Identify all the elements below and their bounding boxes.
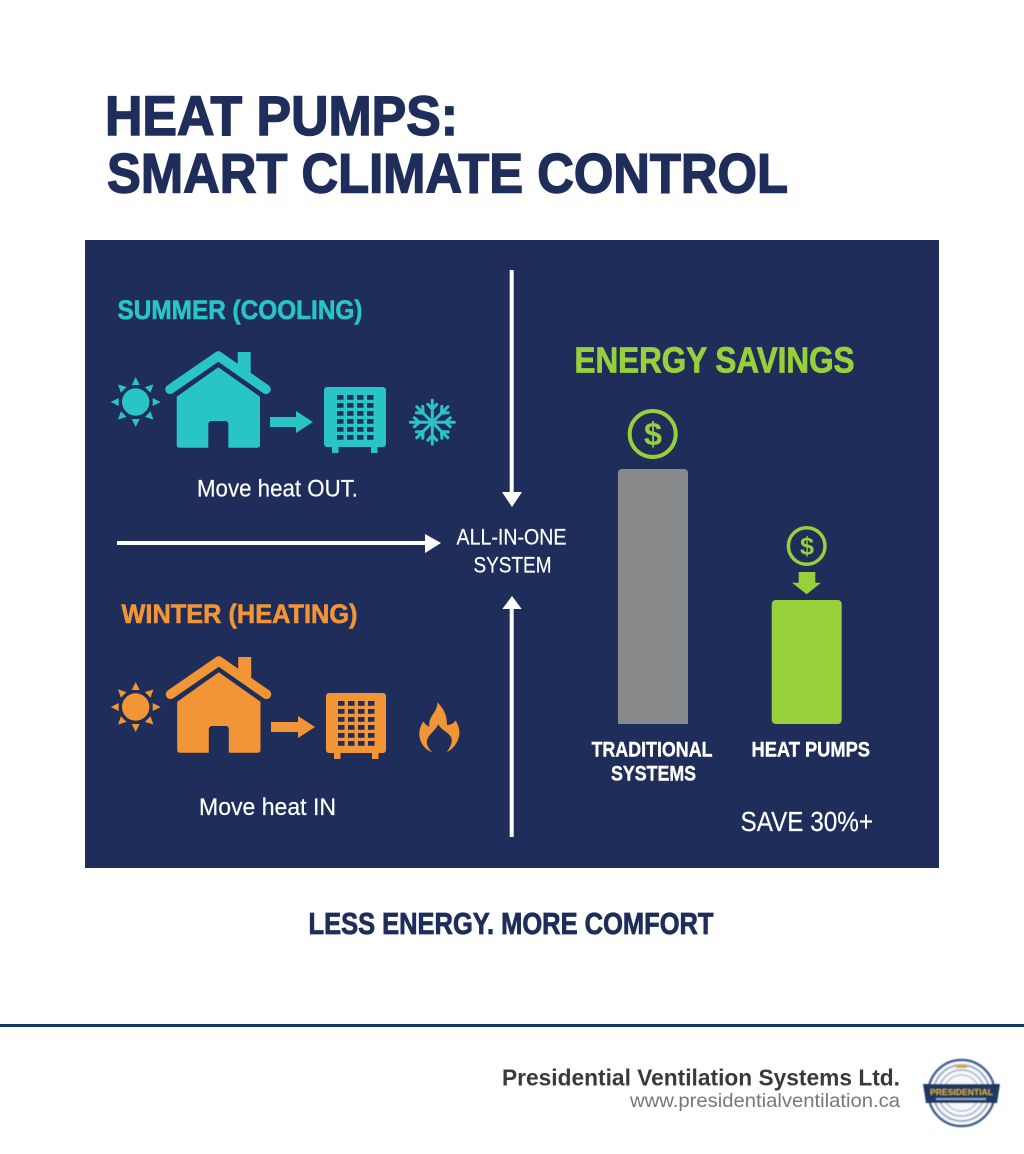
text: move heat in: Move heat IN: [199, 794, 336, 821]
arrow: horizontal to all-in-one: [117, 534, 441, 553]
label: heat pumps: HEAT PUMPS: [752, 738, 870, 762]
bar: heat pumps: [772, 600, 842, 724]
label: traditional systems: [592, 738, 712, 786]
label: all-in-one system: SYSTEM: [474, 552, 552, 578]
tagline: LESS ENERGY. MORE COMFORT: [308, 907, 714, 941]
icon: winter house: [170, 657, 266, 753]
icon: summer arrow: [270, 411, 313, 433]
icon: winter heat pump unit: [326, 693, 386, 759]
text: move heat out: Move heat OUT.: [197, 476, 358, 503]
footer url: www.presidentialventilation.ca: [629, 1090, 900, 1112]
icon: small dollar coin: $: [800, 532, 814, 560]
title: [105, 84, 788, 204]
arrow: from top to all-in-one: [502, 270, 522, 507]
label: traditional systems: TRADITIONAL: [592, 738, 712, 762]
icon: company badge: PRESIDENTIAL: [930, 1088, 993, 1097]
arrow: from bottom to all-in-one: [502, 596, 522, 837]
footer divider: [0, 1024, 1024, 1027]
title: HEAT PUMPS:: [105, 84, 458, 147]
icon: winter sun: [111, 682, 161, 732]
icon: summer heat pump unit: [324, 387, 386, 453]
heading: winter: WINTER (HEATING): [122, 599, 358, 629]
icon: company badge: [923, 1060, 1000, 1126]
label: traditional systems: SYSTEMS: [611, 762, 696, 786]
icon: down arrow: [792, 572, 821, 594]
label: all-in-one system: ALL-IN-ONE: [456, 524, 566, 550]
icon: summer sun: [111, 377, 161, 427]
heading: energy savings: ENERGY SAVINGS: [574, 340, 854, 380]
panel: main: [85, 240, 939, 868]
title: SMART CLIMATE CONTROL: [107, 141, 788, 204]
icon: large dollar coin: [630, 411, 676, 457]
label: all-in-one system: [456, 524, 566, 578]
icon: snowflake: [410, 400, 454, 444]
label: save 30%+: SAVE 30%+: [740, 806, 873, 837]
bar: traditional systems: [618, 469, 688, 724]
icon: summer house: [170, 352, 266, 448]
icon: winter arrow: [271, 716, 315, 738]
icon: large dollar coin: $: [644, 416, 662, 452]
footer company name: Presidential Ventilation Systems Ltd.: [502, 1065, 900, 1091]
icon: flame: [419, 702, 459, 752]
icon: small dollar coin: [788, 528, 825, 564]
heading: summer: SUMMER (COOLING): [118, 295, 362, 325]
